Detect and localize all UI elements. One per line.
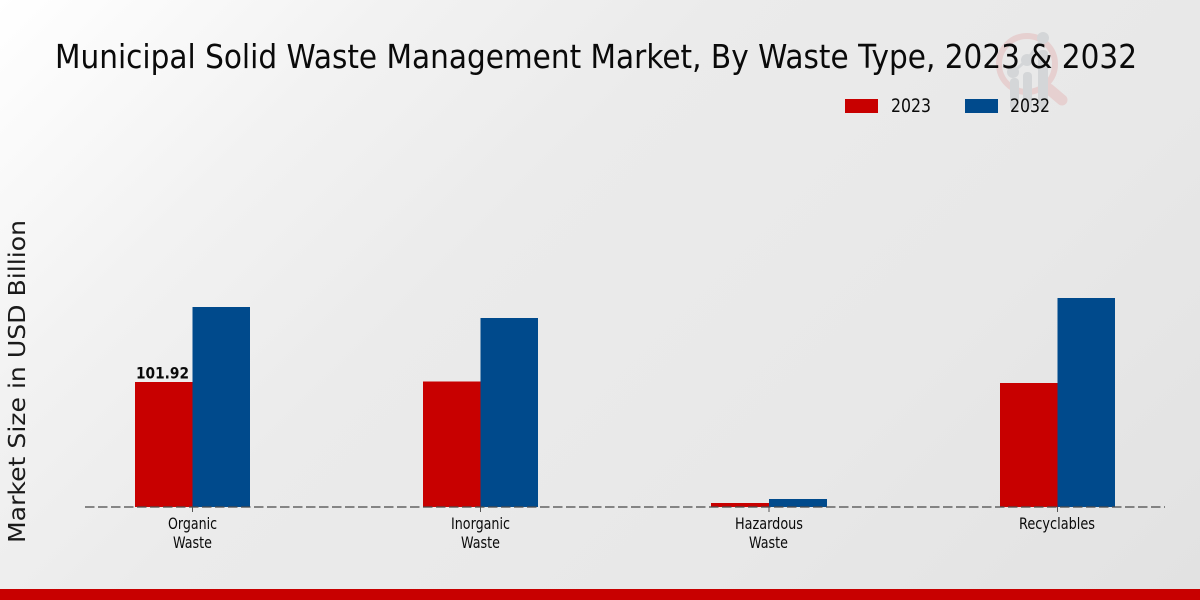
category label: Hazardous Waste: Hazardous	[735, 514, 803, 533]
bar: Hazardous Waste 2023	[711, 503, 769, 507]
category label: Organic Waste	[168, 514, 217, 552]
bar: Inorganic Waste 2032	[480, 318, 538, 507]
bar: Organic Waste 2032	[192, 307, 250, 507]
bar: Recyclables 2032	[1058, 298, 1115, 507]
icon: watermark magnifier logo	[999, 32, 1062, 110]
legend label 2032: 2032	[1010, 96, 1050, 117]
category label: Organic Waste: Organic	[168, 514, 217, 533]
footer bar	[0, 589, 1200, 600]
legend swatch 2023	[845, 99, 878, 113]
category label: Organic Waste: Waste	[173, 533, 212, 552]
bar: Recyclables 2023	[1000, 383, 1058, 507]
category label: Inorganic Waste: Waste	[461, 533, 500, 552]
bar group: Organic Waste	[135, 307, 250, 507]
bar: Inorganic Waste 2023	[423, 382, 480, 507]
value label: 101.92	[136, 364, 189, 382]
bar group: Hazardous Waste	[711, 499, 827, 507]
category label: Inorganic Waste	[451, 514, 510, 552]
legend swatch 2032	[965, 99, 998, 113]
legend label 2023: 2023	[891, 96, 931, 117]
bar: Organic Waste 2023	[135, 382, 192, 507]
category label: Recyclables: Recyclables	[1019, 514, 1095, 533]
bar group: Recyclables	[1000, 298, 1115, 507]
bar group: Inorganic Waste	[423, 318, 538, 507]
bar: Hazardous Waste 2032	[769, 499, 827, 507]
category label: Inorganic Waste: Inorganic	[451, 514, 510, 533]
category label: Hazardous Waste	[735, 514, 803, 552]
category label: Hazardous Waste: Waste	[749, 533, 788, 552]
legend	[845, 96, 1050, 117]
y axis label: Market Size in USD Billion	[5, 220, 31, 543]
